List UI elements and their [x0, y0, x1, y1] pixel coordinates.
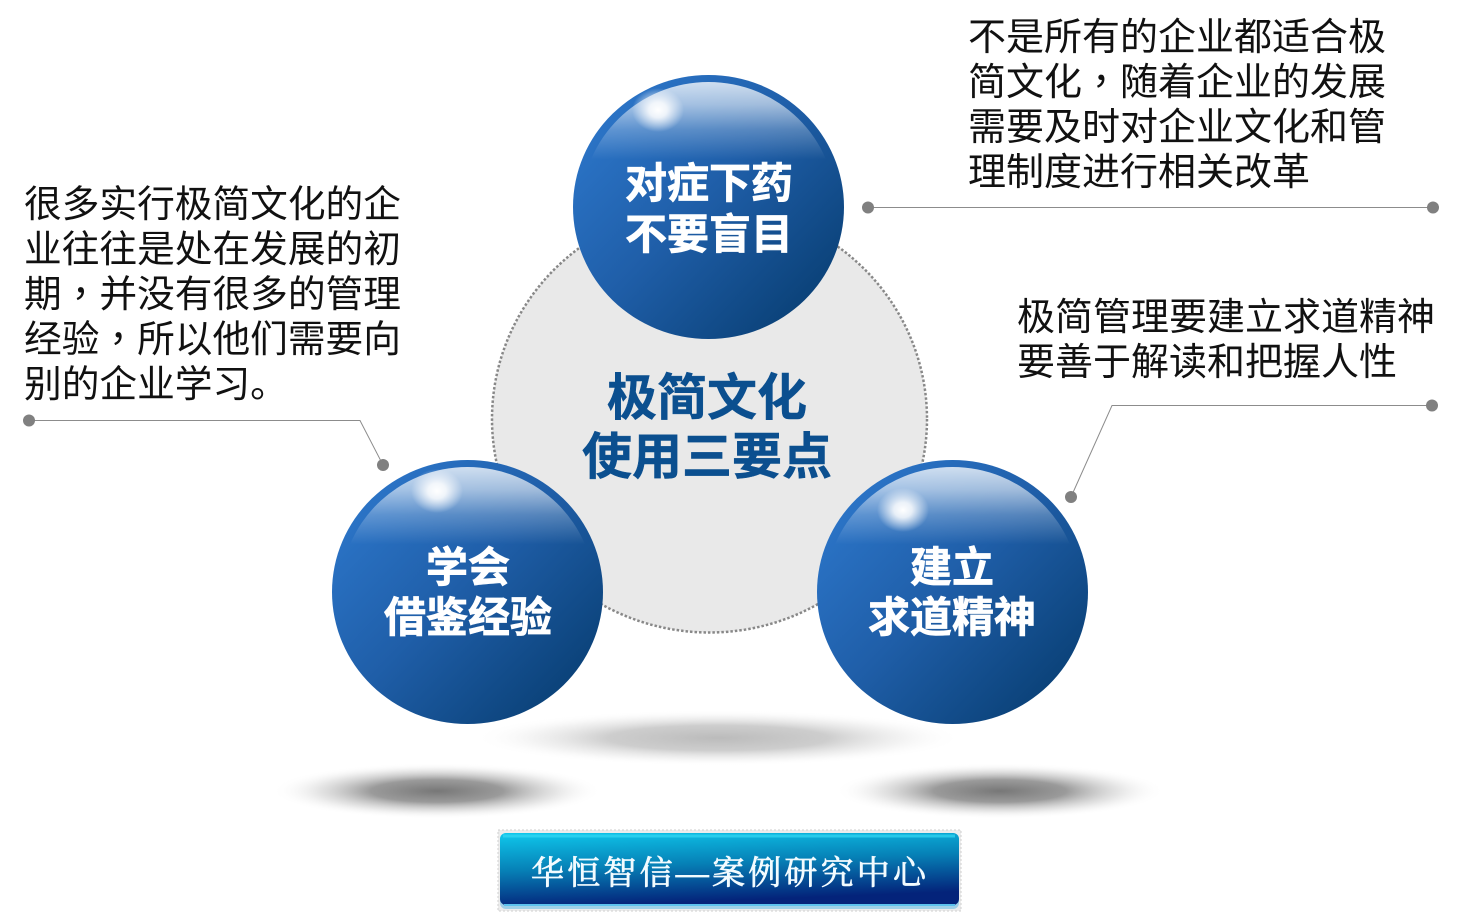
sphere label: left: 借鉴经验	[384, 594, 552, 641]
text block: left: 期，并没有很多的管理	[24, 263, 401, 318]
central title	[582, 370, 832, 485]
banner text: 华恒智信—案例研究中心	[531, 855, 928, 892]
sphere label: top: 对症下药	[625, 160, 793, 207]
sphere: top	[573, 75, 844, 339]
sphere: left	[332, 460, 603, 724]
text block: left: 经验，所以他们需要向	[24, 308, 401, 363]
text block: right	[1017, 297, 1435, 384]
central title: 使用三要点	[582, 429, 832, 485]
text block: left	[24, 183, 401, 405]
leader line: right	[1065, 400, 1438, 503]
sphere label: right: 建立	[910, 544, 994, 591]
shadow: right	[835, 763, 1165, 819]
text block: top right: 需要及时对企业文化和管	[968, 107, 1386, 149]
text block: top right: 理制度进行相关改革	[968, 152, 1310, 194]
text block: right: 极简管理要建立求道精神	[1017, 297, 1435, 339]
text block: top right: 简文化，随着企业的发展	[968, 51, 1386, 106]
sphere: right	[817, 460, 1088, 724]
text block: top right	[968, 17, 1386, 194]
text block: left: 很多实行极简文化的企	[24, 183, 401, 225]
central grey circle	[492, 206, 927, 632]
sphere label: top	[625, 160, 793, 258]
banner: case research centre	[498, 830, 961, 911]
text block: top right: 不是所有的企业都适合极	[968, 17, 1386, 59]
sphere label: left	[384, 544, 552, 641]
leader line: top right	[862, 202, 1439, 214]
leader line: left	[23, 414, 389, 471]
sphere label: right: 求道精神	[868, 594, 1036, 641]
text block: left: 别的企业学习。	[24, 363, 288, 405]
shadow: left	[272, 763, 602, 819]
sphere label: top: 不要盲目	[625, 211, 793, 258]
sphere label: right	[868, 544, 1036, 641]
text block: left: 业往往是处在发展的初	[24, 228, 401, 270]
central title: 极简文化	[607, 370, 807, 426]
sphere label: left: 学会	[426, 544, 510, 591]
shadow: centre	[473, 710, 963, 766]
text block: right: 要善于解读和把握人性	[1017, 342, 1397, 384]
